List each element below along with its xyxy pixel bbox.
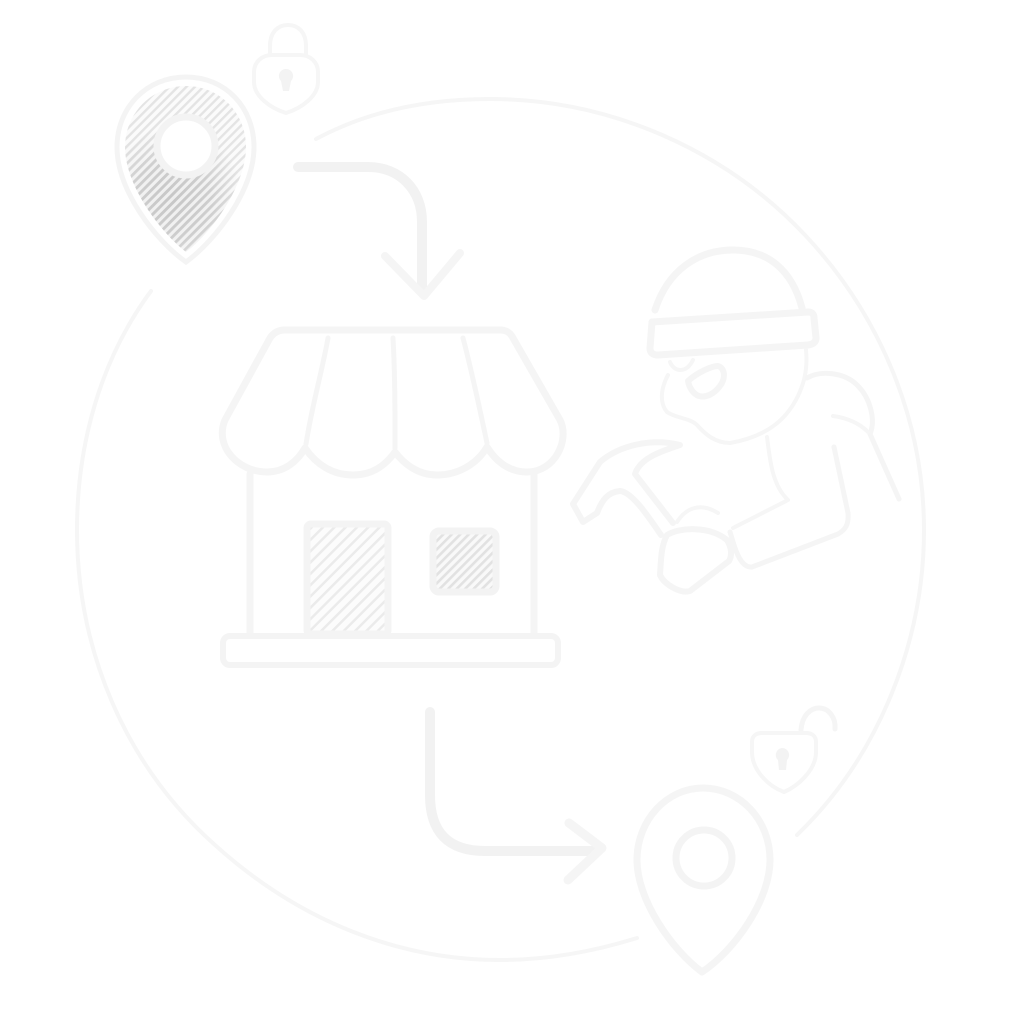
illustration: relocating a shop after a break-in: [75, 23, 926, 976]
icon: closed padlock: [254, 25, 318, 113]
shop awning: [222, 330, 563, 475]
burglar eye: [670, 360, 693, 370]
icon: origin location pin: [117, 77, 254, 262]
burglar nose: [688, 366, 724, 397]
icon: destination location pin: [637, 788, 770, 972]
shop window: [433, 531, 496, 592]
burglar head and beanie: [655, 250, 802, 310]
icon: open padlock: [752, 708, 835, 792]
shop walls: [250, 474, 534, 634]
circular path: lower left arc: [77, 291, 637, 960]
burglar with hammer: [573, 250, 899, 592]
hammer: [573, 442, 680, 535]
circular path: upper right arc: [316, 99, 924, 835]
burglar arm: [730, 447, 848, 567]
burglar chest: [733, 437, 788, 528]
shop door: [307, 524, 388, 634]
arrow: pin to shop: [298, 167, 460, 296]
arrow: shop to new location: [430, 712, 602, 880]
burglar fist: [660, 529, 731, 592]
shop: [222, 330, 563, 665]
burglar shoulder and back: [807, 373, 899, 499]
shop base: [223, 636, 558, 665]
burglar thumb: [677, 507, 718, 522]
